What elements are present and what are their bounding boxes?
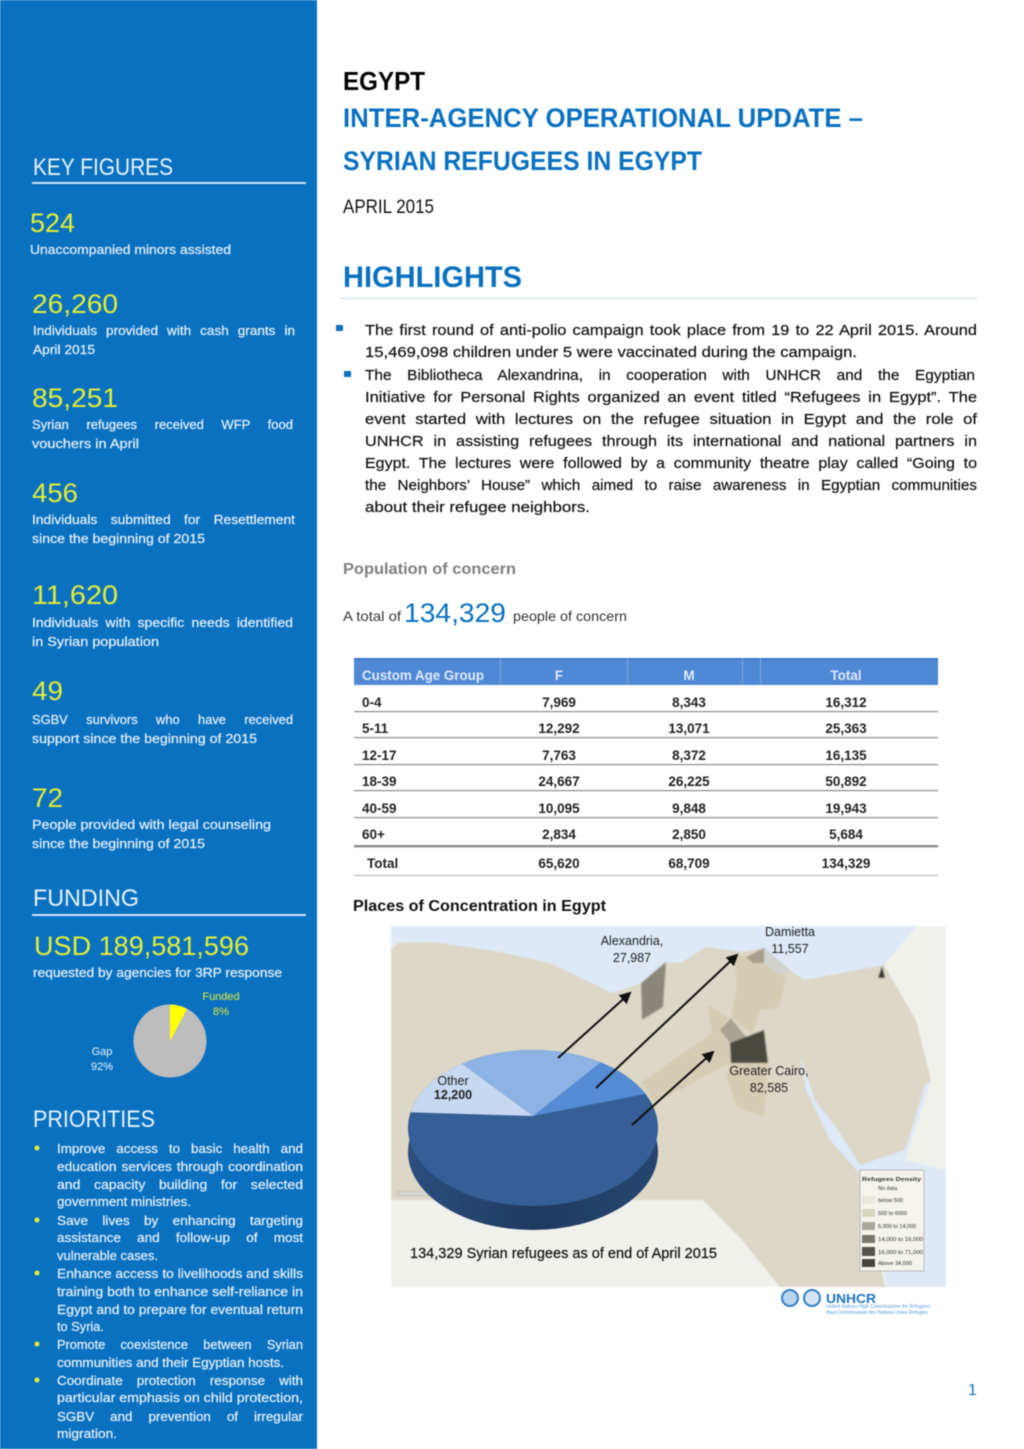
table: population by age group: 13,071 xyxy=(668,721,710,736)
total people of concern: people of concern xyxy=(513,608,627,624)
logo: UNHCR xyxy=(782,1290,930,1316)
heading: key figures: KEY FIGURES xyxy=(33,154,173,181)
panel: left sidebar xyxy=(0,0,317,1449)
logo: UNHCR: Haut Commissariat des Nations Unies Refugies xyxy=(826,1310,928,1316)
table: population by age group: Total xyxy=(830,668,862,683)
map legend: 14,000 to 16,000 xyxy=(878,1237,923,1243)
table: population by age group: M xyxy=(683,668,695,683)
label: Damietta xyxy=(765,925,815,956)
priorities list: education services through coordination xyxy=(57,1159,303,1174)
table: population by age group: 2,850 xyxy=(672,827,706,842)
key figure: specific needs xyxy=(32,580,293,649)
highlights text: The first round of anti-polio campaign took place from 19 to 22 April 2015. Around xyxy=(365,322,977,339)
key figure: cash grants xyxy=(32,289,295,357)
table: population by age group: Total xyxy=(367,856,398,871)
table: population by age group: 26,225 xyxy=(668,774,710,789)
table: population by age group: 12-17 xyxy=(362,748,397,763)
map legend: 6,000 to 14,000 xyxy=(878,1224,916,1230)
highlights text: 15,469,098 children under 5 were vaccinated during the campaign. xyxy=(365,344,857,361)
table: population by age group: 25,363 xyxy=(825,721,867,736)
key figure: SGBV survivors: 49 xyxy=(32,676,63,706)
table: population by age group: 60+ xyxy=(362,827,385,842)
key figure: resettlement: since the beginning of 2015 xyxy=(32,531,205,546)
priorities list: Egypt and to prepare for eventual return xyxy=(57,1302,303,1317)
highlights text: event started with lectures on the refugee situation in Egypt and the role of xyxy=(365,411,978,428)
table: population by age group: 40-59 xyxy=(362,801,397,816)
highlights text xyxy=(336,322,978,516)
pie chart: funding: 92% xyxy=(91,1061,113,1073)
priorities list: training both to enhance self-reliance in xyxy=(57,1284,303,1299)
label: Damietta: 11,557 xyxy=(771,942,809,956)
key figure: WFP food vouchers: 85,251 xyxy=(32,383,118,413)
key figure: WFP food vouchers xyxy=(32,383,293,451)
arrows: pie to map regions xyxy=(558,955,737,1125)
logo: UNHCR: United Nations High Commissioner for Refugees xyxy=(826,1304,930,1310)
key figure: SGBV survivors xyxy=(32,676,293,746)
priorities list: Save lives by enhancing targeting xyxy=(57,1213,303,1228)
table: population by age group: 5,684 xyxy=(829,827,863,842)
table: population by age group: 50,892 xyxy=(825,774,867,789)
table: population by age group: 16,135 xyxy=(825,748,867,763)
table: population by age group: 0-4 xyxy=(362,695,382,710)
page number: 1 xyxy=(968,1382,977,1399)
highlights text: The Bibliotheca Alexandrina, in cooperation with UNHCR and the Egyptian xyxy=(365,367,975,384)
table: population by age group: 2,834 xyxy=(542,827,576,842)
pie chart: refugees by location xyxy=(400,1040,666,1230)
heading: population of concern: Population of concern xyxy=(343,561,516,578)
map legend: Above 34,000 xyxy=(878,1261,912,1267)
table: population by age group: 16,312 xyxy=(825,695,867,710)
table: population by age group: 12,292 xyxy=(538,721,580,736)
heading: priorities: PRIORITIES xyxy=(33,1106,155,1133)
key figure: resettlement: 456 xyxy=(32,478,78,508)
funding amount: requested by agencies for 3RP response xyxy=(33,965,282,980)
key figure: legal counseling: People provided with legal counseling xyxy=(32,817,271,832)
total people of concern: 134,329 xyxy=(404,598,506,628)
key figure: specific needs: in Syrian population xyxy=(32,634,159,649)
priorities list: Coordinate protection response with xyxy=(57,1373,303,1388)
priorities list: to Syria. xyxy=(57,1319,104,1334)
key figure: resettlement xyxy=(32,478,295,546)
priorities list: Enhance access to livelihoods and skills xyxy=(57,1266,304,1281)
priorities list: and capacity building for selected xyxy=(57,1177,303,1192)
priorities list: Promote coexistence between Syrian xyxy=(57,1337,303,1352)
funding amount xyxy=(33,931,282,980)
label: Alexandria xyxy=(601,934,663,965)
title block: INTER-AGENCY OPERATIONAL UPDATE – xyxy=(343,103,863,133)
label: Greater Cairo xyxy=(729,1064,809,1095)
priorities list: particular emphasis on child protection, xyxy=(57,1390,303,1405)
total people of concern xyxy=(343,598,627,628)
key figure: legal counseling xyxy=(32,783,271,851)
priorities list: Improve access to basic health and xyxy=(57,1141,303,1156)
heading: places of concentration: Places of Concentration in Egypt xyxy=(353,898,607,915)
key figure: specific needs: Individuals with specific needs identified xyxy=(32,615,293,630)
label: Greater Cairo: 82,585 xyxy=(750,1081,788,1095)
map legend: 500 to 6000 xyxy=(878,1211,907,1217)
priorities list xyxy=(34,1141,304,1441)
key figure: cash grants: April 2015 xyxy=(33,342,95,357)
highlights text: about their refugee neighbors. xyxy=(365,499,590,516)
key figure: WFP food vouchers: Syrian refugees received WFP food xyxy=(32,417,293,432)
map caption: 134,329 Syrian refugees as of end of April 2015 xyxy=(410,1245,717,1262)
table: population by age group: 65,620 xyxy=(538,856,580,871)
map legend: below 500 xyxy=(878,1198,903,1204)
key figure: WFP food vouchers: vouchers in April xyxy=(32,436,139,451)
table: population by age group: 134,329 xyxy=(822,856,870,871)
key figure: legal counseling: since the beginning of 2015 xyxy=(32,836,205,851)
key figure: cash grants: Individuals provided with cash grants in xyxy=(33,323,295,338)
priorities list: vulnerable cases. xyxy=(57,1248,158,1263)
table: population by age group: 10,095 xyxy=(538,801,580,816)
highlights text: Egypt. The lectures were followed by a community theatre play called “Going to xyxy=(365,455,977,472)
table: population by age group: 7,969 xyxy=(542,695,576,710)
table: population by age group: 18-39 xyxy=(362,774,397,789)
heading: funding: FUNDING xyxy=(33,885,139,912)
priorities list: communities and their Egyptian hosts. xyxy=(57,1355,284,1370)
key figure: SGBV survivors: support since the beginning of 2015 xyxy=(32,731,257,746)
highlights text: the Neighbors’ House” which aimed to raise awareness in Egyptian communities xyxy=(365,477,977,494)
label: Damietta: Damietta xyxy=(765,925,815,939)
key figure: unaccompanied minors xyxy=(30,208,231,257)
table: population by age group: 68,709 xyxy=(668,856,710,871)
pie chart: funding xyxy=(91,991,240,1078)
title block xyxy=(343,66,863,176)
title block: EGYPT xyxy=(343,66,425,96)
key figure: SGBV survivors: SGBV survivors who have received xyxy=(32,712,293,727)
table: population by age group: 5-11 xyxy=(362,721,389,736)
highlights text: Initiative for Personal Rights organized an event titled “Refugees in Egypt”. The xyxy=(365,389,977,406)
table: population by age group: F xyxy=(555,668,563,683)
pie chart: funding: Gap xyxy=(92,1046,112,1058)
table: population by age group: 7,763 xyxy=(542,748,576,763)
map: Egypt refugee density xyxy=(391,925,946,1287)
map legend xyxy=(860,1170,924,1271)
key figure: cash grants: 26,260 xyxy=(32,289,118,319)
table: population by age group: 19,943 xyxy=(825,801,867,816)
priorities list: SGBV and prevention of irregular xyxy=(57,1409,304,1424)
map legend: Refugees Density xyxy=(862,1177,922,1183)
priorities list: government ministries. xyxy=(57,1194,191,1209)
date: APRIL 2015 xyxy=(343,197,434,218)
pie chart: refugees by location: 12,200 xyxy=(434,1088,472,1102)
table: population by age group: 8,372 xyxy=(672,748,706,763)
pie chart: funding: 8% xyxy=(213,1006,229,1018)
priorities list: assistance and follow-up of most xyxy=(57,1230,303,1245)
table: population by age group: Custom Age Group xyxy=(362,668,484,683)
map legend: No data xyxy=(878,1186,898,1192)
logo: UNHCR: UNHCR xyxy=(826,1291,877,1306)
highlights text: UNHCR in assisting refugees through its international and national partners in xyxy=(365,433,977,450)
table: population by age group: 8,343 xyxy=(672,695,706,710)
funding amount: USD 189,581,596 xyxy=(34,931,249,961)
key figure: unaccompanied minors: Unaccompanied minors assisted xyxy=(30,242,231,257)
map legend: 16,000 to 71,000 xyxy=(878,1250,923,1256)
key figure: specific needs: 11,620 xyxy=(32,580,118,610)
key figure: resettlement: Individuals submitted for Resettlement xyxy=(32,512,295,527)
key figure: legal counseling: 72 xyxy=(32,783,63,813)
priorities list: migration. xyxy=(57,1426,117,1441)
pie chart: refugees by location: Other xyxy=(437,1074,469,1088)
table: population by age group xyxy=(354,658,938,876)
table: population by age group: 24,667 xyxy=(538,774,580,789)
total people of concern: A total of xyxy=(343,608,401,624)
label: Greater Cairo: Greater Cairo, xyxy=(729,1064,809,1078)
pie chart: funding: Funded xyxy=(202,991,240,1003)
heading: highlights: HIGHLIGHTS xyxy=(343,261,522,294)
label: Alexandria: Alexandria, xyxy=(601,934,663,948)
title block: SYRIAN REFUGEES IN EGYPT xyxy=(343,146,702,176)
key figure: unaccompanied minors: 524 xyxy=(30,208,75,238)
table: population by age group: 9,848 xyxy=(672,801,706,816)
label: Alexandria: 27,987 xyxy=(613,951,651,965)
